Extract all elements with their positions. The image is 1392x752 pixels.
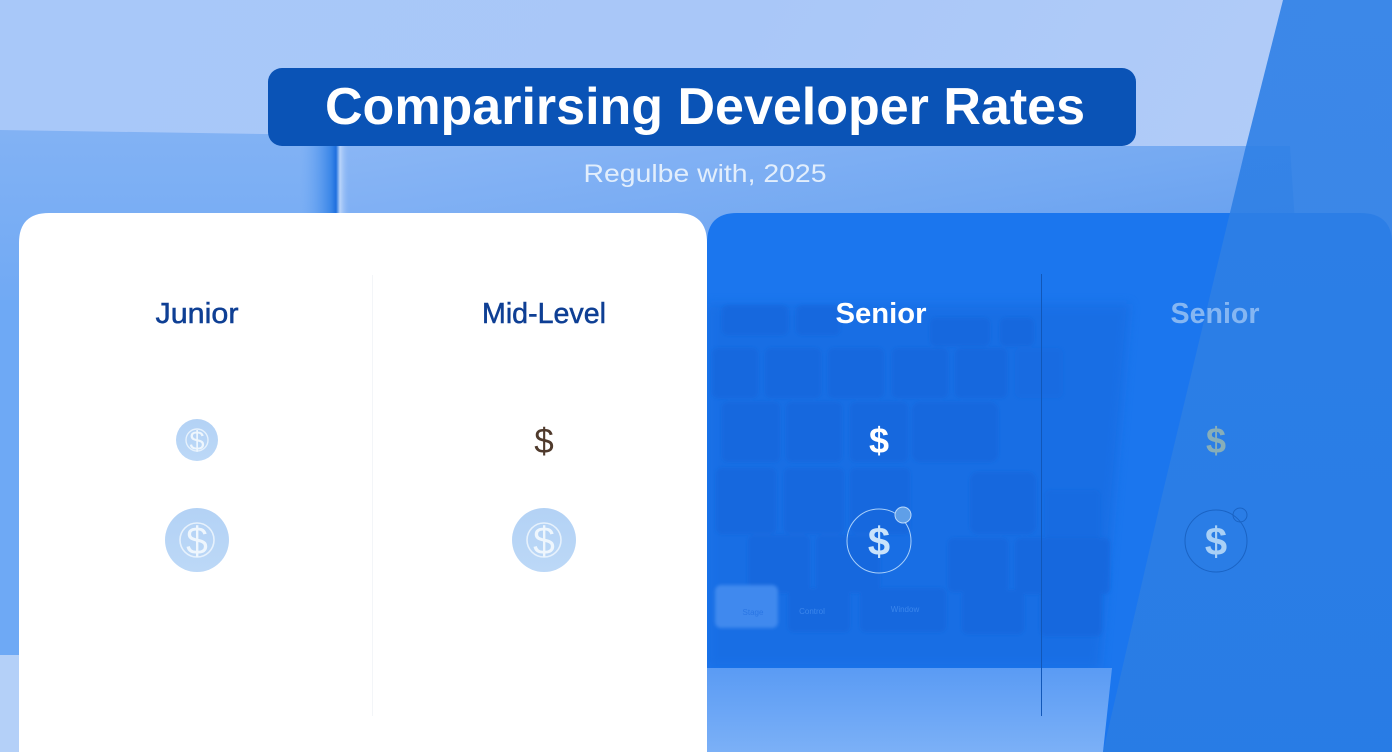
title banner: Comparirsing Developer Rates — [325, 78, 1085, 136]
icon: large dollar coin, Mid-Level — [512, 508, 576, 572]
subtitle: Regulbe with, 2025 — [584, 160, 826, 188]
column heading: Senior: Senior — [836, 298, 926, 330]
divider: senior columns — [1041, 274, 1042, 716]
panel: senior rates (blue) — [707, 213, 1392, 752]
keyboard photo overlay — [707, 304, 1130, 752]
icon: large dollar coin, Mid-Level: $ — [533, 520, 555, 563]
icon: muted outlined dollar coin — [1185, 508, 1247, 572]
icon: muted dollar sign: $ — [1206, 420, 1226, 461]
icon: outlined dollar coin, Senior — [847, 507, 911, 573]
right translucent wedge — [1103, 0, 1392, 752]
column heading: Junior: Junior — [156, 298, 239, 330]
keyboard photo overlay: Control — [799, 607, 825, 616]
icon: dollar sign, Mid-Level: $ — [534, 422, 554, 461]
title banner — [268, 68, 1136, 146]
icon: large dollar coin, Junior: $ — [186, 520, 208, 563]
column heading: Senior, second column: Senior — [1170, 298, 1260, 330]
icon: muted outlined dollar coin: $ — [1205, 520, 1227, 564]
icon: dollar sign, Senior: $ — [869, 420, 889, 461]
panel: junior and mid-level (white) — [19, 213, 707, 752]
icon: small dollar coin, Junior: $ — [189, 426, 205, 456]
column heading: Mid-Level: Mid-Level — [482, 298, 606, 330]
icon: small dollar coin, Junior — [176, 419, 218, 461]
keyboard photo overlay: Window — [891, 605, 919, 614]
keyboard photo overlay: Stage — [743, 608, 764, 617]
icon: outlined dollar coin, Senior: $ — [868, 520, 890, 564]
icon: large dollar coin, Junior — [165, 508, 229, 572]
